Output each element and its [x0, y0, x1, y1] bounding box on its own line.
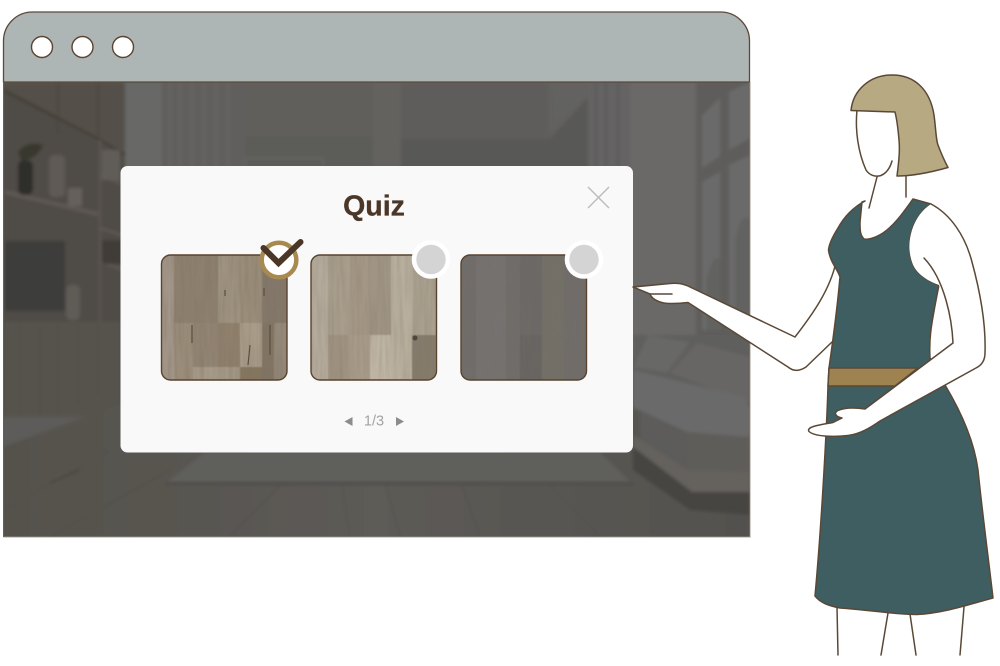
- icon: selected check: [262, 242, 300, 277]
- window dots: [32, 36, 134, 58]
- face outline: [856, 110, 892, 176]
- hair: [851, 75, 948, 176]
- room photo background: [3, 82, 751, 538]
- quiz modal: [120, 166, 633, 452]
- icon: option radio 3: [565, 240, 603, 279]
- holding arm: [809, 204, 985, 436]
- pointing arm: [633, 262, 850, 370]
- legs: [837, 607, 964, 655]
- title bar: [4, 12, 750, 82]
- dress: [815, 199, 993, 614]
- neck and face: [857, 110, 913, 220]
- swatch: light wood: [308, 252, 440, 384]
- belt: [828, 368, 918, 386]
- modal panel: [120, 166, 633, 452]
- pagination: 1/3: [364, 414, 384, 430]
- neck lines: [869, 176, 906, 208]
- floor: [3, 403, 750, 538]
- icon: option radio 2: [412, 240, 450, 279]
- woman figure: [633, 75, 993, 655]
- browser window: [3, 12, 751, 538]
- icon: close: [588, 187, 609, 208]
- shelving: [3, 82, 125, 417]
- sofa: [634, 336, 695, 356]
- heading: Quiz: [343, 190, 405, 222]
- swatch: grey wood: [458, 252, 590, 384]
- pagination: [344, 414, 404, 430]
- swatch: brown wood: [158, 252, 291, 384]
